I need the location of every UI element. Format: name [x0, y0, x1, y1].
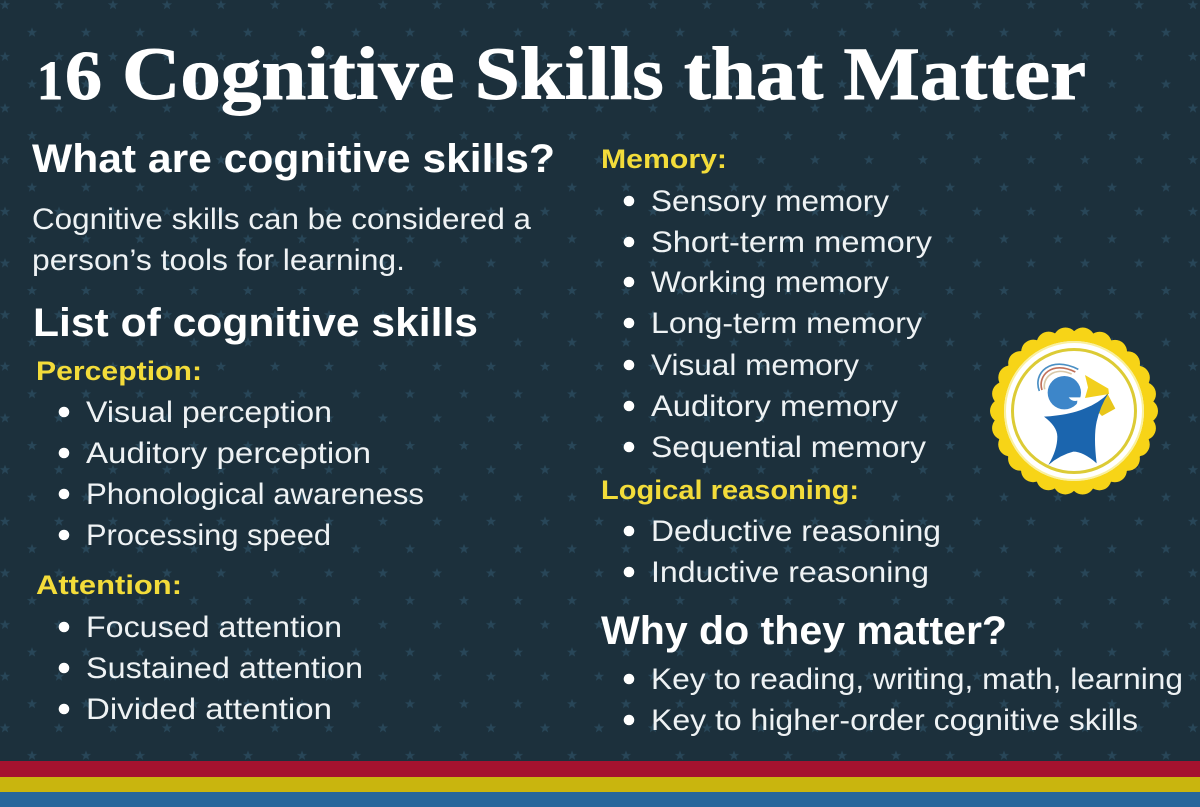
list: why they matter: Key to higher-order cognitive skills [651, 704, 1138, 737]
list: why they matter: Key to reading, writing, math, learning [651, 663, 1183, 696]
list: memory skills: Sensory memory [651, 185, 889, 218]
list: perception skills: Visual perception [86, 396, 332, 429]
subheading: memory: Memory: [601, 144, 727, 174]
subheading: logical reasoning: Logical reasoning: [601, 475, 859, 505]
list: perception skills: Processing speed [86, 519, 331, 552]
panel: attention [36, 570, 363, 726]
list: why they matter [624, 663, 1183, 737]
list: memory skills: Short-term memory [651, 226, 932, 259]
list: attention skills: Divided attention [86, 693, 332, 726]
heading: list of cognitive skills: List of cognitive skills [33, 301, 478, 345]
title: 1 [37, 50, 63, 111]
title: Cognitive Skills that Matter [122, 33, 1086, 116]
title: 6 [65, 38, 102, 115]
list: perception skills: Phonological awareness [86, 478, 424, 511]
list: reasoning skills: Inductive reasoning [651, 556, 929, 589]
decorative color bands [0, 761, 1200, 807]
list: reasoning skills [624, 515, 941, 589]
list: memory skills: Sequential memory [651, 431, 926, 464]
list: perception skills [59, 396, 424, 552]
subheading: perception: Perception: [36, 356, 202, 386]
subheading: attention: Attention: [36, 570, 182, 600]
panel: logical reasoning [601, 475, 941, 589]
list: attention skills: Sustained attention [86, 652, 363, 685]
list: memory skills: Working memory [651, 266, 889, 299]
list: memory skills: Auditory memory [651, 390, 898, 423]
heading: what are cognitive skills: What are cognitive skills? [32, 137, 555, 181]
text block: definition [32, 203, 531, 277]
panel: memory [601, 144, 932, 464]
list: reasoning skills: Deductive reasoning [651, 515, 941, 548]
icon: logo badge [994, 331, 1154, 491]
text block: definition: person’s tools for learning. [32, 244, 405, 277]
list: attention skills [59, 611, 363, 726]
list: memory skills: Visual memory [651, 349, 859, 382]
heading: why do they matter: Why do they matter? [601, 609, 1007, 653]
list: memory skills [624, 185, 932, 464]
list: perception skills: Auditory perception [86, 437, 371, 470]
list: memory skills: Long-term memory [651, 307, 922, 340]
icon: logo figure [1038, 364, 1115, 465]
list: attention skills: Focused attention [86, 611, 342, 644]
text block: definition: Cognitive skills can be considered a [32, 203, 531, 236]
panel: perception [36, 356, 424, 552]
